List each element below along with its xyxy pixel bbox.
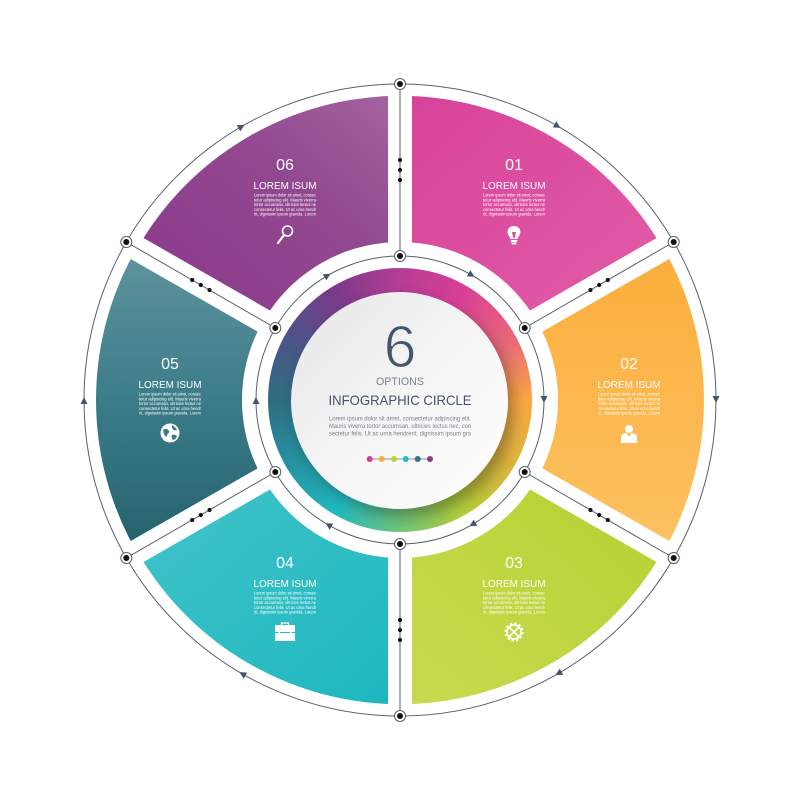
panel: 06: [144, 96, 388, 310]
body text 02: consectetur felis. Ut ac urna hendr: [598, 406, 661, 411]
number 02: 02: [620, 356, 638, 373]
body text 01: tetur adipiscing elit. Mauris viverra: [483, 197, 546, 202]
outer nodes: [121, 78, 679, 722]
heading 06: LOREM ISUM: [254, 181, 316, 192]
six colour dots: [367, 456, 433, 462]
number 04: 04: [276, 555, 294, 572]
centre body text: Lorem ipsum dolor sit amet, consectetur adipiscing elit.: [329, 416, 471, 422]
heading 03: LOREM ISUM: [482, 579, 546, 590]
spokes: [126, 84, 674, 716]
number 05: 05: [161, 356, 179, 373]
body text 06: rit, dignissim ipsum gravida. Lorem: [254, 212, 316, 217]
body text 03: Lorem ipsum dolor sit amet, consec: [483, 590, 545, 596]
number 06: 06: [276, 157, 294, 174]
big number 6: 6: [384, 314, 416, 380]
body text 06: tetur adipiscing elit. Mauris viverra: [254, 197, 317, 202]
body text 03: consectetur felis. Ut ac urna hendr: [483, 605, 546, 610]
segment 01: [412, 96, 656, 310]
body text 02: [598, 392, 661, 416]
panel: 03: [412, 490, 656, 704]
panel: 02: [542, 259, 704, 541]
body text 05: consectetur felis. Ut ac urna hendr: [139, 406, 202, 411]
body text 03: tetur adipiscing elit. Mauris viverra: [483, 595, 546, 600]
segment 03: [412, 490, 656, 704]
body text 02: tetur adipiscing elit. Mauris viverra: [598, 396, 661, 401]
spoke dots: [190, 158, 610, 642]
body text 01: tortor accumsan, ultricies lectus ne: [483, 202, 546, 207]
icon: briefcase: [275, 623, 295, 641]
outer ring line: [84, 84, 716, 716]
body text 01: rit, dignissim ipsum gravida. Lorem: [483, 212, 545, 217]
body text 06: Lorem ipsum dolor sit amet, consec: [254, 192, 316, 198]
centre body text: Mauris viverra tortor accumsan, ultricies lectus nec, con: [329, 423, 471, 430]
gradient donut ring: [268, 268, 532, 532]
icon: gear: [505, 623, 523, 641]
body text 06: [254, 192, 317, 217]
body text 06: tortor accumsan, ultricies lectus ne: [254, 202, 317, 207]
body text 02: Lorem ipsum dolor sit amet, consec: [598, 392, 660, 396]
inner ring line: [256, 256, 544, 544]
icon: magnifier: [278, 226, 292, 243]
body text 02: rit, dignissim ipsum gravida. Lorem: [598, 411, 660, 416]
body text 04: tetur adipiscing elit. Mauris viverra: [254, 595, 317, 600]
body text 01: [483, 192, 546, 217]
heading 02: LOREM ISUM: [598, 380, 660, 391]
icon: light bulb: [508, 226, 520, 244]
segment 02: [542, 259, 704, 541]
body text 04: tortor accumsan, ultricies lectus ne: [254, 600, 317, 605]
options label: OPTIONS: [376, 376, 424, 388]
body text 03: [483, 590, 546, 615]
body text 05: tetur adipiscing elit. Mauris viverra: [139, 396, 202, 401]
panel: 01: [412, 96, 656, 310]
number 01: 01: [505, 157, 523, 174]
heading 04: LOREM ISUM: [254, 579, 316, 590]
body text 05: tortor accumsan, ultricies lectus ne: [139, 401, 202, 406]
body text 03: tortor accumsan, ultricies lectus ne: [483, 600, 546, 605]
heading 05: LOREM ISUM: [138, 380, 202, 391]
body text 05: [139, 392, 202, 416]
body text 06: consectetur felis. Ut ac urna hendr: [254, 207, 317, 212]
outer ring arrows: [80, 121, 720, 679]
centre title: INFOGRAPHIC CIRCLE: [328, 392, 472, 408]
inner ring arrows: [252, 270, 548, 530]
body text 04: rit, dignissim ipsum gravida. Lorem: [254, 610, 316, 615]
number 03: 03: [505, 555, 523, 572]
body text 04: consectetur felis. Ut ac urna hendr: [254, 605, 317, 610]
centre white disc: [291, 292, 508, 509]
body text 01: consectetur felis. Ut ac urna hendr: [483, 207, 546, 212]
panel: 04: [144, 490, 388, 704]
centre body text: [329, 416, 471, 438]
segment 06: [144, 96, 388, 310]
segment 04: [144, 490, 388, 704]
body text 01: Lorem ipsum dolor sit amet, consec: [483, 192, 545, 198]
body text 05: rit, dignissim ipsum gravida. Lorem: [139, 411, 201, 416]
body text 02: tortor accumsan, ultricies lectus ne: [598, 401, 661, 406]
inner nodes: [270, 250, 530, 550]
icon: globe: [160, 424, 180, 442]
segment 05: [96, 259, 258, 541]
body text 05: Lorem ipsum dolor sit amet, consec: [139, 392, 201, 396]
centre body text: sectetur felis. Ut ac urna hendrerit, dignissim ipsum gra: [329, 430, 471, 438]
heading 01: LOREM ISUM: [482, 181, 546, 192]
icon: person: [621, 425, 637, 443]
panel: 05: [96, 259, 258, 541]
body text 04: Lorem ipsum dolor sit amet, consec: [254, 590, 316, 596]
body text 04: [254, 590, 317, 615]
body text 03: rit, dignissim ipsum gravida. Lorem: [483, 610, 545, 615]
